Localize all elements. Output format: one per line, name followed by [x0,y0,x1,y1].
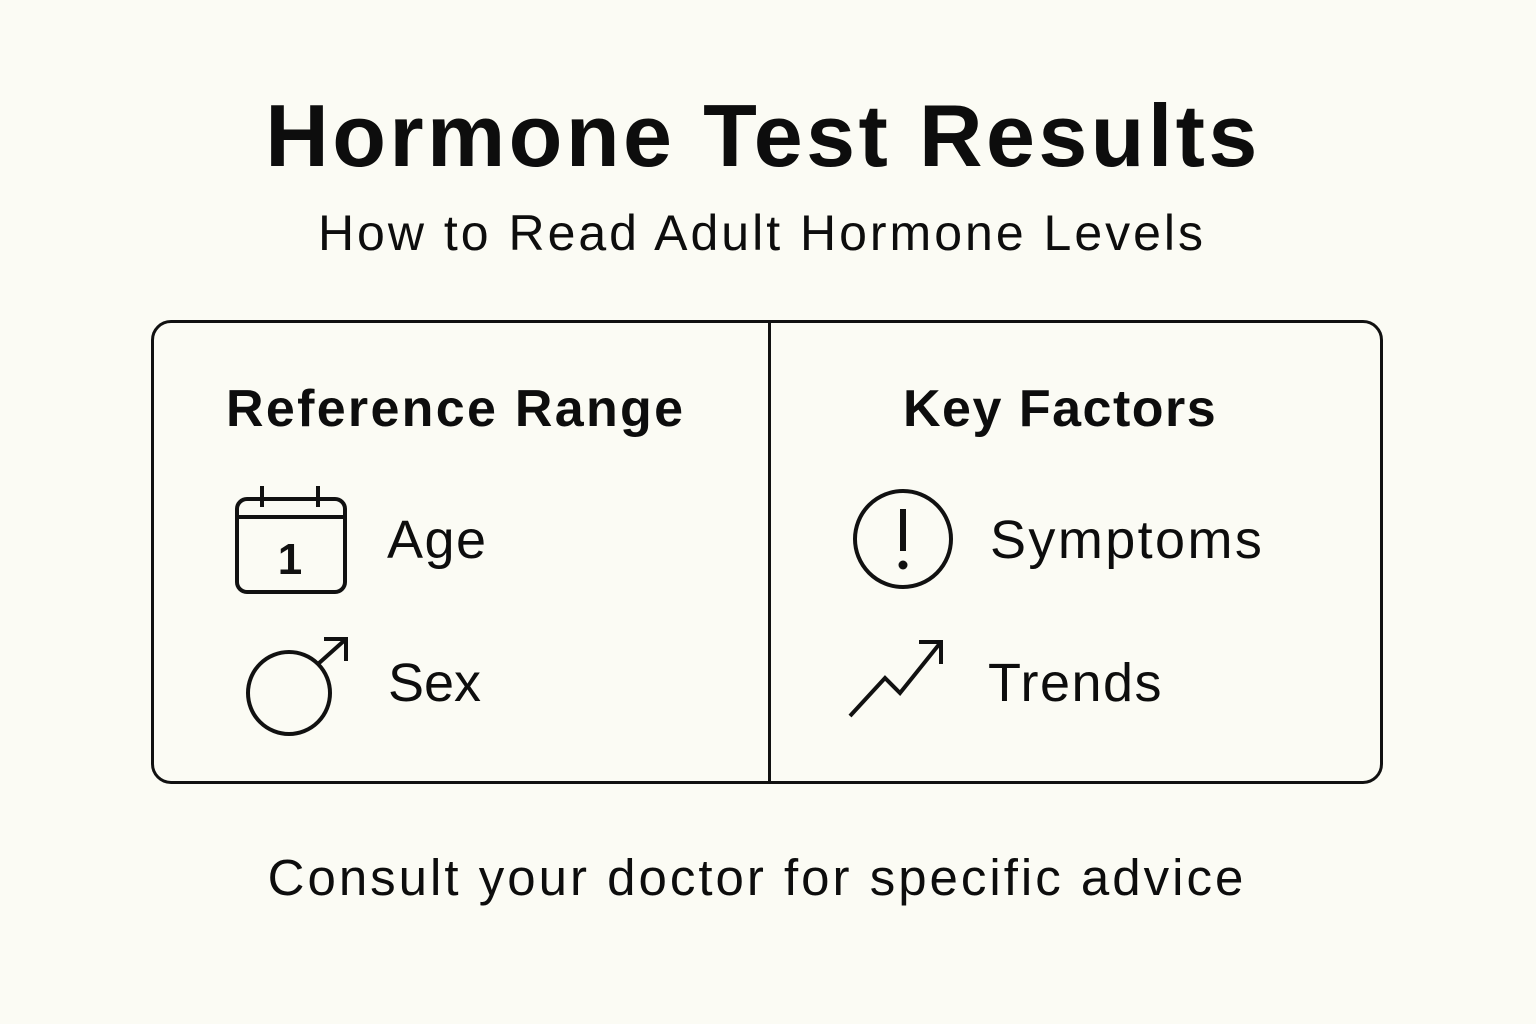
icon: trend arrow [848,640,943,718]
footer note: Consult your doctor for specific advice [268,849,1246,906]
title: Hormone Test Results [265,86,1261,185]
panel: reference range [154,323,771,781]
heading: key factors: Key Factors [903,380,1217,438]
icon: calendar: 1 [278,535,302,584]
text: symptoms: Symptoms [990,510,1264,570]
icon: exclamation [853,489,953,589]
text: age: Age [387,510,488,570]
subtitle: How to Read Adult Hormone Levels [318,205,1206,261]
text: sex: Sex [388,653,481,713]
panel: key factors [848,380,1264,718]
text: trends: Trends [988,653,1163,713]
icon: male symbol [246,637,348,736]
heading: reference range: Reference Range [226,380,685,438]
icon: calendar [235,486,347,594]
panel frame [151,320,1383,784]
